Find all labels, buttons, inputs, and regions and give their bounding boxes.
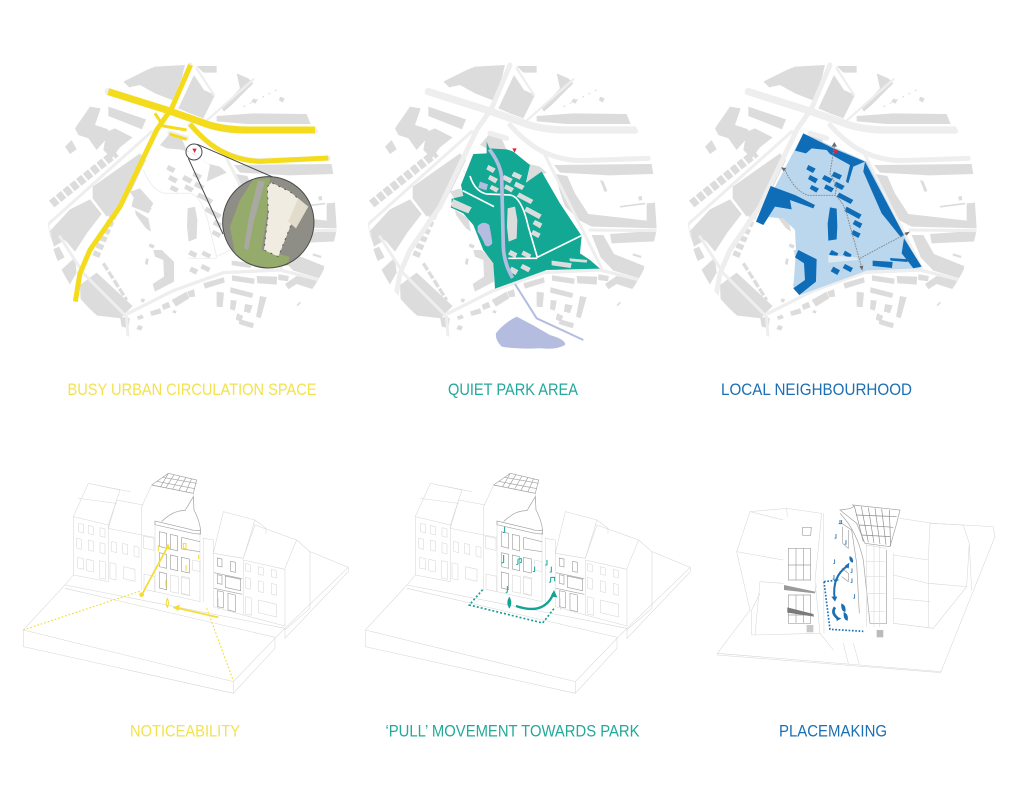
label: noticeability: NOTICEABILITY [130, 722, 240, 740]
neighbourhood light blue zone [757, 133, 921, 295]
music notes [502, 527, 555, 593]
blue arrows and people [833, 566, 847, 618]
central building facade [494, 473, 584, 612]
white path stub [828, 255, 858, 263]
speaker marker [507, 597, 511, 609]
panel: quiet park map [367, 65, 657, 349]
street block drawing [365, 483, 690, 693]
street block outline [717, 508, 995, 673]
label: busy urban circulation space: BUSY URBAN CIRCULATION SPACE [68, 381, 316, 399]
blue music notes [833, 520, 855, 598]
yellow sight lines and arrows [23, 543, 233, 681]
stream [489, 149, 513, 278]
site marker [192, 149, 197, 153]
label: quiet park area: QUIET PARK AREA [448, 381, 578, 399]
left house windows and balconies [784, 527, 817, 632]
park paths [463, 176, 583, 258]
label: pull movement towards park: ‘PULL’ MOVEMENT TOWARDS PARK [386, 722, 640, 740]
blue figures [831, 556, 853, 621]
base map: figure ground [47, 65, 337, 345]
blue dotted zone [824, 580, 863, 631]
park green area [451, 142, 600, 289]
yellow markers [139, 543, 180, 611]
teal pull arrow [516, 593, 553, 609]
panel: local neighbourhood map [687, 65, 977, 345]
base map: figure ground [687, 65, 977, 345]
site marker [512, 148, 517, 153]
arrowheads [781, 142, 910, 271]
teal dotted zone [469, 590, 555, 623]
panel: noticeability axonometric [23, 473, 348, 693]
lake [496, 317, 565, 349]
neighbourhood buildings [756, 133, 922, 295]
central building seen from side [840, 505, 900, 637]
central building facade [152, 473, 242, 612]
label: placemaking: PLACEMAKING [779, 722, 887, 740]
panel: placemaking axonometric [717, 505, 995, 673]
street block drawing [23, 483, 348, 693]
ponds [478, 182, 492, 246]
magnifier callout [186, 144, 275, 234]
movement arrows [785, 147, 907, 267]
site marker [834, 149, 838, 154]
panel: busy urban circulation map [47, 65, 337, 345]
arrowhead [551, 590, 557, 597]
panel: pull movement axonometric [365, 473, 690, 693]
label: local neighbourhood: LOCAL NEIGHBOURHOOD [721, 381, 912, 399]
yellow traffic roads [75, 65, 328, 302]
base map: figure ground [367, 65, 657, 345]
inset aerial photo [223, 177, 314, 268]
